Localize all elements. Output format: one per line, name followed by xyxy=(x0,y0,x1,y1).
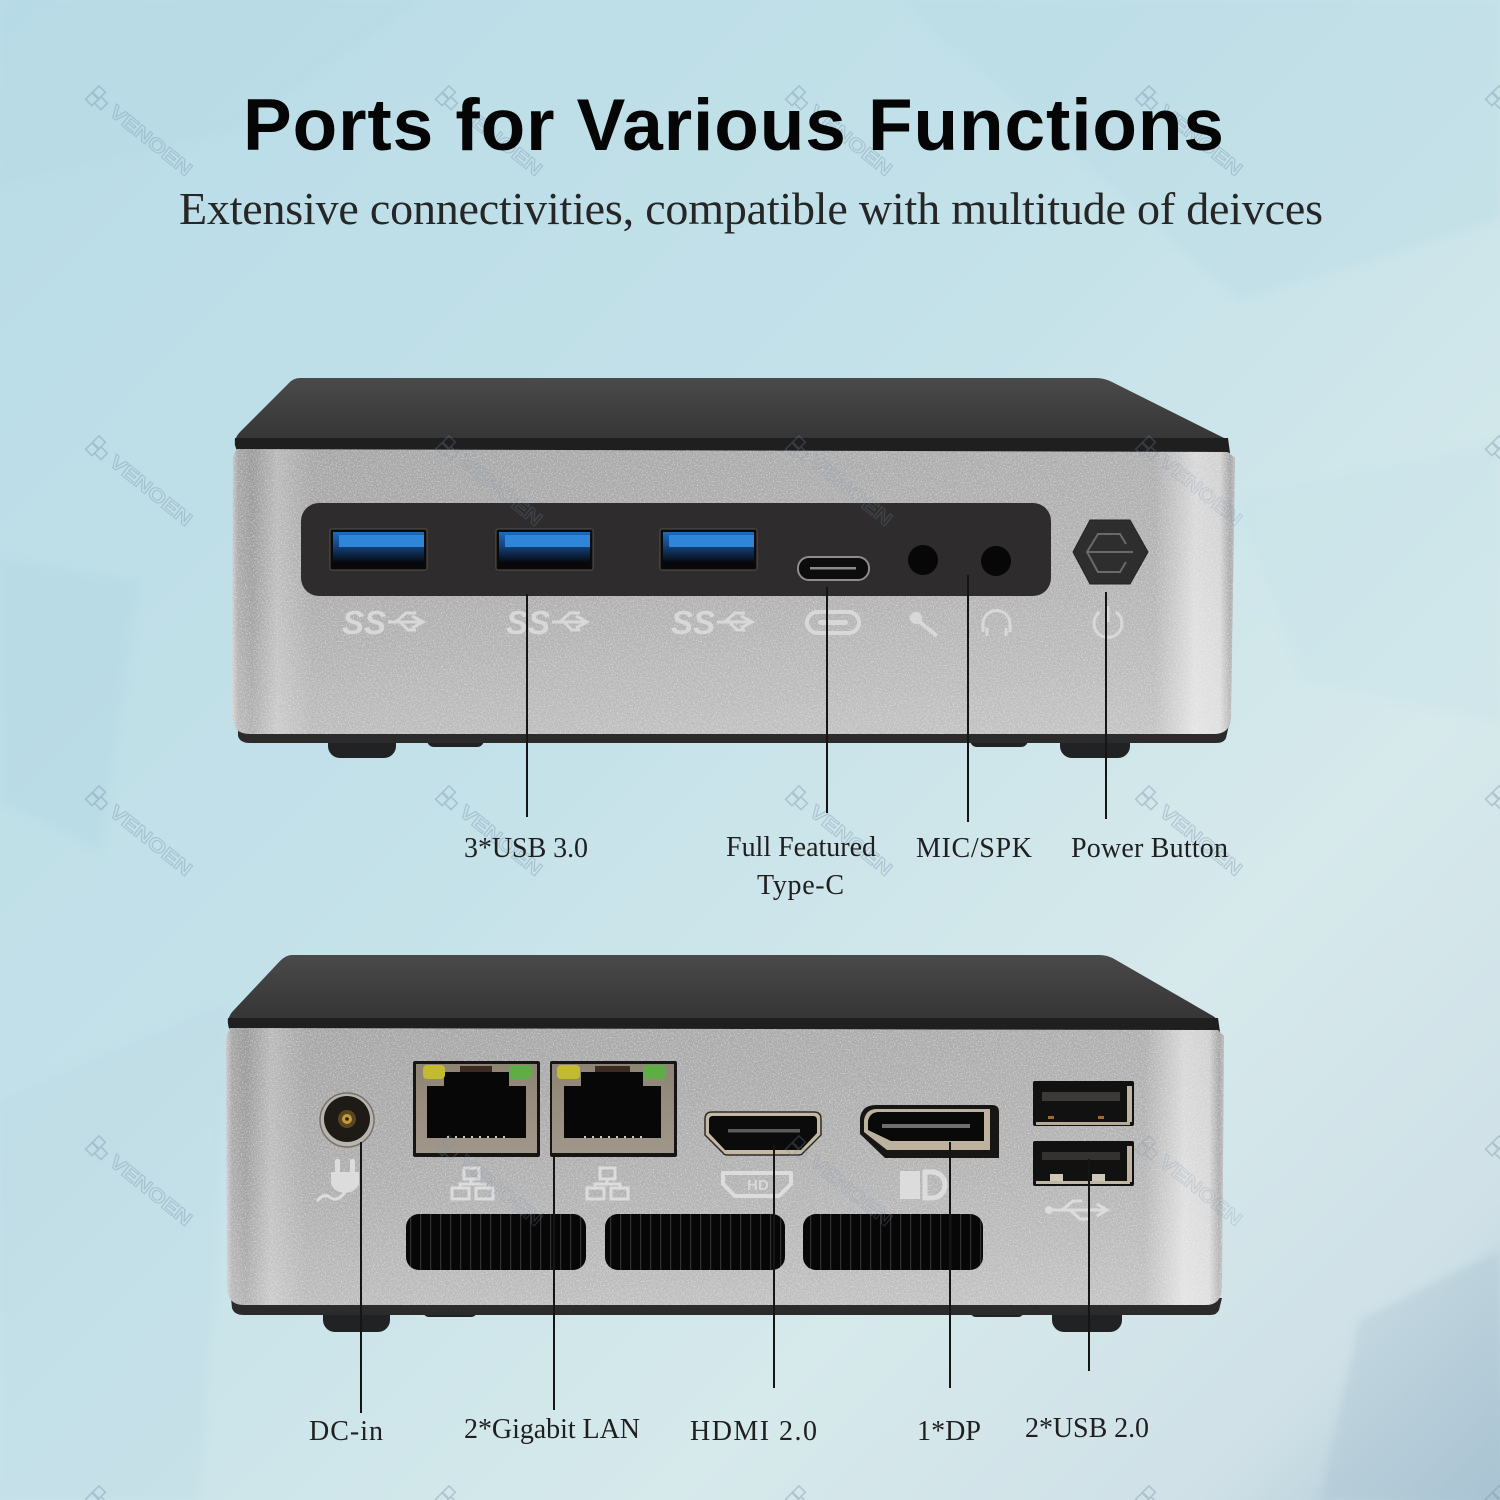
watermarks: VENOEN xyxy=(805,102,896,181)
title: Ports for Various Functions xyxy=(243,85,1224,166)
front device xyxy=(232,378,1235,758)
dc jack xyxy=(320,1093,374,1147)
watermarks over devices: VENOEN xyxy=(455,1152,546,1231)
port panel xyxy=(301,503,1051,596)
watermarks over devices: VENOEN xyxy=(1155,1152,1246,1231)
silk-screen icons: SS xyxy=(671,604,715,641)
silk-screen icons xyxy=(317,1159,1107,1219)
bottom band xyxy=(238,725,1229,743)
watermarks: VENOEN xyxy=(1155,102,1246,181)
watermarks: VENOEN xyxy=(105,1152,196,1231)
label: Power Button: Power Button xyxy=(1071,833,1228,864)
label: Full Featured Type-C xyxy=(726,832,876,901)
watermarks: VENOEN xyxy=(455,102,546,181)
label: MIC/SPK: MIC/SPK xyxy=(916,833,1032,864)
back device xyxy=(226,955,1224,1332)
vent grilles xyxy=(406,1214,983,1270)
label: 2*USB 2.0: 2*USB 2.0 xyxy=(1025,1413,1149,1444)
watermarks: VENOEN xyxy=(105,802,196,881)
label: Full Featured Type-C: Full Featured xyxy=(726,832,876,863)
top lid xyxy=(235,378,1228,446)
hdmi port xyxy=(705,1112,821,1155)
metal body xyxy=(226,1028,1224,1305)
watermarks over devices: VENOEN xyxy=(805,452,896,531)
label: 3*USB 3.0: 3*USB 3.0 xyxy=(464,833,588,864)
watermarks: VENOEN xyxy=(805,802,896,881)
label: DC-in: DC-in xyxy=(309,1416,383,1447)
watermarks over devices xyxy=(436,436,1246,1231)
top lid xyxy=(228,955,1218,1024)
silk-screen icons: HD xyxy=(747,1177,769,1194)
power button xyxy=(1073,520,1148,584)
leader lines xyxy=(361,575,1106,1413)
watermarks: VENOEN xyxy=(455,802,546,881)
audio jacks xyxy=(908,545,1011,576)
silk-screen icons: SS xyxy=(342,604,386,641)
watermarks: VENOEN xyxy=(1155,802,1246,881)
feet xyxy=(323,1303,1122,1332)
watermarks over devices: VENOEN xyxy=(455,452,546,531)
watermarks: VENOEN xyxy=(105,452,196,531)
watermarks over devices: VENOEN xyxy=(1155,452,1246,531)
bottom band xyxy=(231,1298,1222,1315)
label: Full Featured Type-C: Type-C xyxy=(757,870,844,901)
usb 2.0 ports xyxy=(1033,1081,1134,1186)
display port xyxy=(860,1105,999,1158)
silk-screen icons xyxy=(342,604,1122,641)
label: 1*DP: 1*DP xyxy=(917,1416,981,1447)
subtitle: Extensive connectivities, compatible with multitude of deivces xyxy=(179,183,1323,234)
usb 3.0 ports xyxy=(330,529,757,570)
feet xyxy=(328,728,1130,758)
lan ports xyxy=(413,1061,677,1157)
silk-screen icons: SS xyxy=(506,604,550,641)
label: HDMI 2.0: HDMI 2.0 xyxy=(690,1416,817,1447)
type-c port xyxy=(798,557,869,580)
watermarks over devices: VENOEN xyxy=(805,1152,896,1231)
metal body xyxy=(232,449,1235,734)
label: 2*Gigabit LAN: 2*Gigabit LAN xyxy=(464,1414,640,1445)
watermarks: VENOEN xyxy=(105,102,196,181)
